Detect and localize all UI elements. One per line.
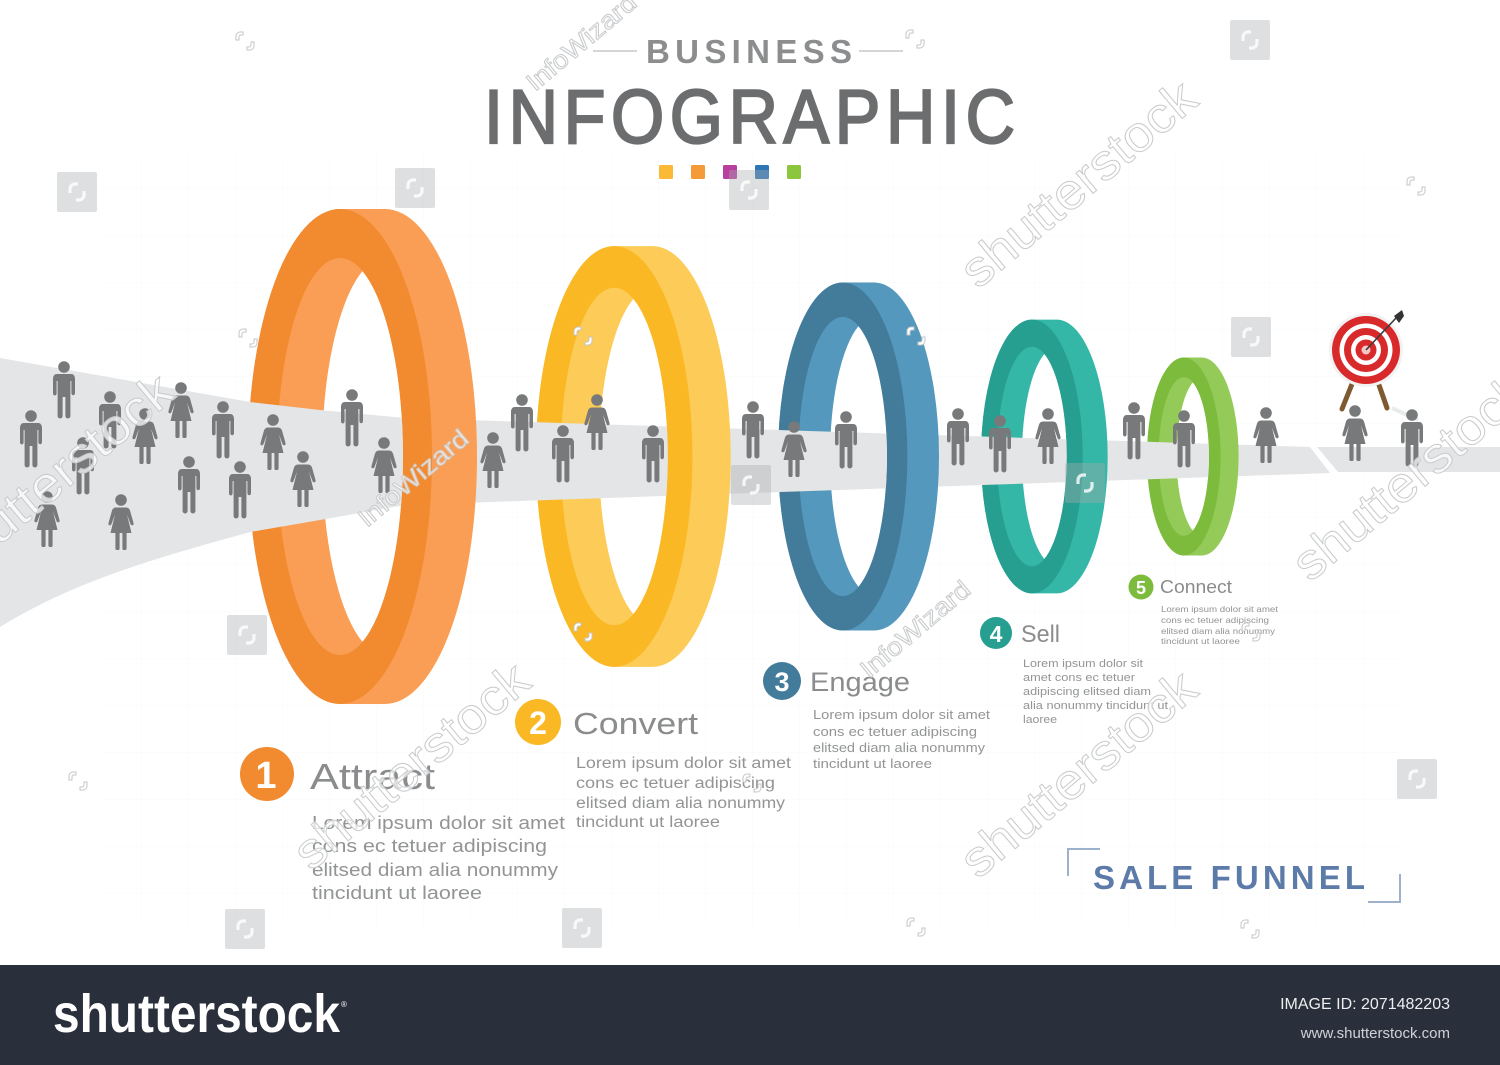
watermark text: shutterstock [282,650,541,880]
step 5: connect: Connect [1160,577,1232,597]
step 1: attract: elitsed diam alia nonummy [312,860,558,880]
step 4: sell: adipiscing elitsed diam [1023,686,1151,698]
icon: target on easel [1329,310,1418,420]
step 5: connect: tincidunt ut laoree [1161,636,1240,646]
road: funnel path [0,358,1500,627]
background grid [100,155,1400,925]
step 1: attract: tincidunt ut laoree [312,883,482,903]
step 4: sell [980,617,1168,726]
ring 3: blue [778,283,939,630]
watermark text: InfoWizard [521,0,642,97]
step 3: engage: Engage [810,667,910,697]
step 1: attract: Lorem ipsum dolor sit amet [312,813,565,833]
title: infographic: INFOGRAPHIC [484,76,1015,160]
sale funnel label [1068,849,1400,902]
step 1: attract: 1 [255,755,277,797]
step 4: sell: laoree [1023,714,1057,726]
step 5: connect [1128,574,1279,646]
step 5: connect: 5 [1136,578,1146,598]
footer bar: www.shutterstock.com [1300,1025,1450,1042]
step 3: engage [763,662,990,771]
step 2: convert: Convert [573,706,698,741]
step 4: sell: alia nonummy tincidunt ut [1023,700,1168,712]
ring 4: teal [981,320,1108,593]
step 3: engage: elitsed diam alia nonummy [813,740,986,755]
people crowd [20,361,1423,550]
ring 5: green [1147,358,1239,556]
step 1: attract: cons ec tetuer adipiscing [312,836,547,856]
watermark text: shutterstock [949,658,1208,888]
step 2: convert [515,699,792,831]
sale funnel label: SALE FUNNEL [1093,859,1365,896]
step 2: convert: Lorem ipsum dolor sit amet [576,755,792,772]
step 3: engage: cons ec tetuer adipiscing [813,724,977,739]
watermark text: shutterstock [949,68,1208,298]
road passing through the rings [248,402,1209,532]
footer bar: ® [341,1000,347,1009]
footer bar: IMAGE ID: 2071482203 [1280,996,1450,1013]
step 3: engage: 3 [774,667,790,697]
step 2: convert: 2 [529,705,547,741]
step 2: convert: elitsed diam alia nonummy [576,795,785,812]
step 1: attract [240,747,565,903]
title: business: BUSINESS [646,33,852,70]
step 5: connect: cons ec tetuer adipiscing [1161,615,1269,625]
step 2: convert: cons ec tetuer adipiscing [576,775,775,792]
step 2: convert: tincidunt ut laoree [576,814,720,831]
step 3: engage: Lorem ipsum dolor sit amet [813,707,990,722]
colour squares [659,165,801,179]
step 1: attract: Attract [310,756,435,797]
step 5: connect: Lorem ipsum dolor sit amet [1161,604,1279,614]
ring 1: orange [248,209,477,704]
watermark text: InfoWizard [353,424,474,533]
step 5: connect: elitsed diam alia nonummy [1161,626,1276,636]
step 4: sell: 4 [990,621,1003,647]
step 4: sell: amet cons ec tetuer [1023,672,1135,684]
watermark text: InfoWizard [855,575,976,684]
step 4: sell: Sell [1021,621,1060,648]
step 4: sell: Lorem ipsum dolor sit [1023,658,1143,670]
step 3: engage: tincidunt ut laoree [813,756,932,771]
ring 2: yellow [536,246,731,667]
footer bar [0,965,1500,1065]
footer bar: shutterstock [53,984,341,1044]
